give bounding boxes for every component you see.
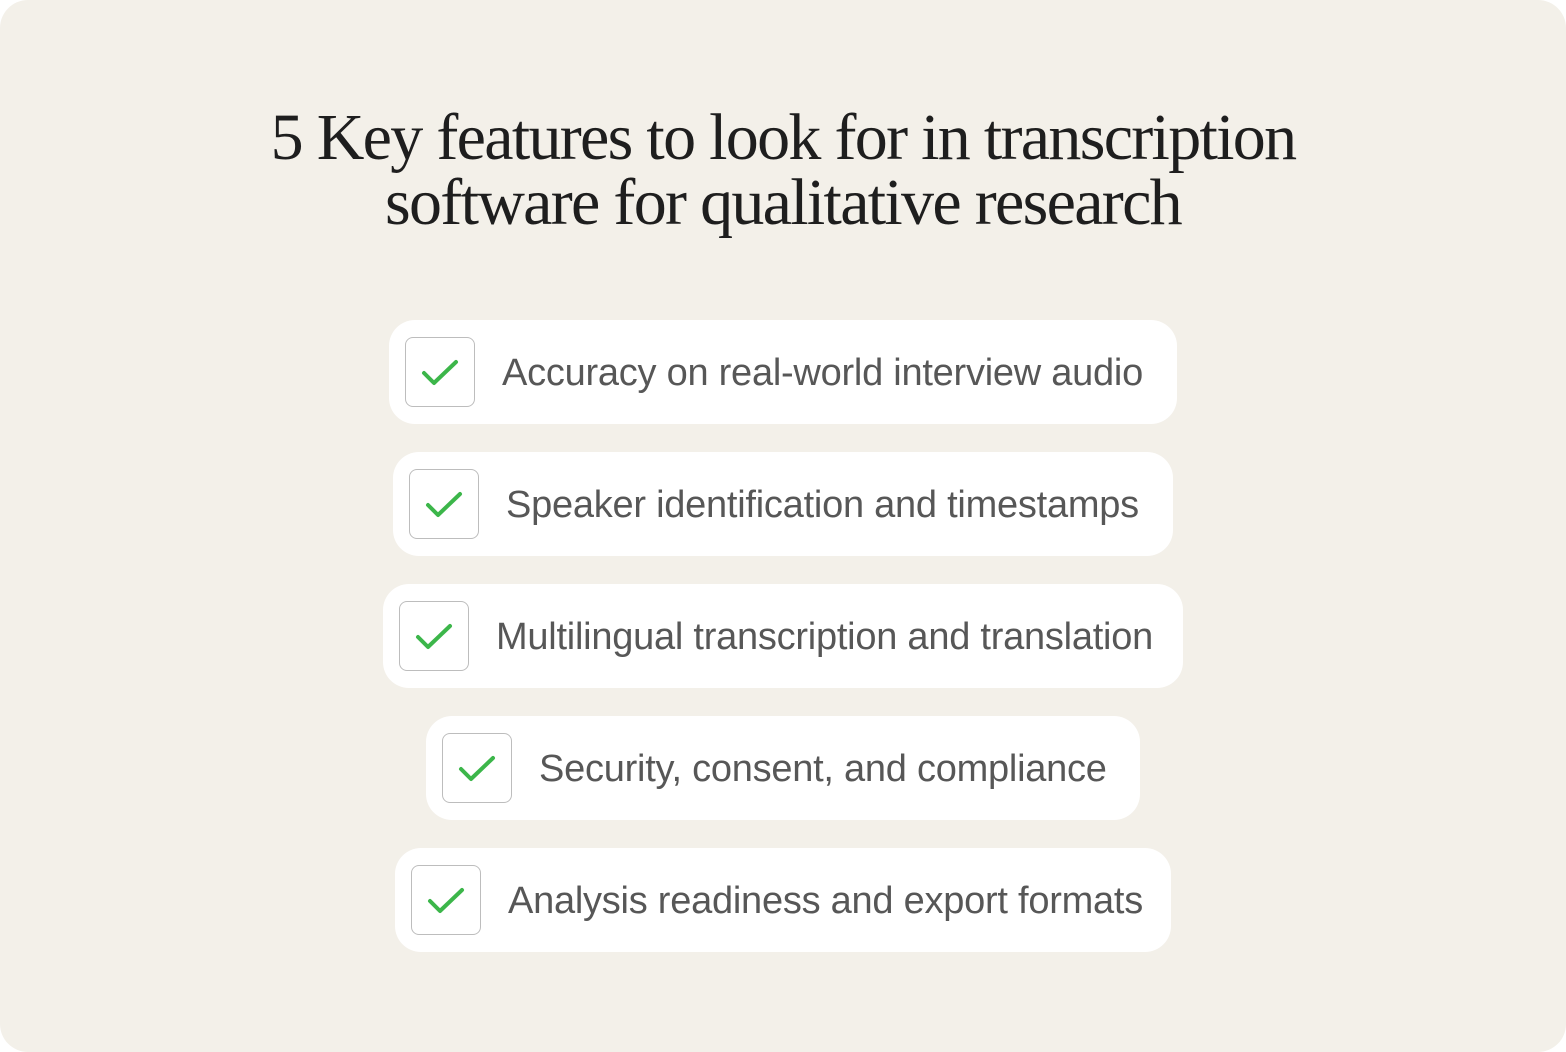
icon: checkbox <box>405 337 475 407</box>
text: multilingual: Multilingual transcription and translation <box>496 616 1153 658</box>
row 2 <box>393 452 1173 556</box>
text: accuracy: Accuracy on real-world interview audio <box>502 352 1143 394</box>
text: speaker: Speaker identification and timestamps <box>506 484 1139 526</box>
text: security: Security, consent, and compliance <box>539 748 1107 790</box>
icon: checkbox <box>409 469 479 539</box>
row 3 <box>383 584 1183 688</box>
row 1 <box>389 320 1177 424</box>
icon: checkbox <box>442 733 512 803</box>
icon: checkbox <box>411 865 481 935</box>
title: software for qualitative research <box>385 166 1181 239</box>
title <box>271 101 1296 239</box>
row 5 <box>395 848 1171 952</box>
row 4 <box>426 716 1140 820</box>
icon: checkbox <box>399 601 469 671</box>
text: analysis: Analysis readiness and export formats <box>508 880 1143 922</box>
title: 5 Key features to look for in transcription <box>271 101 1295 174</box>
